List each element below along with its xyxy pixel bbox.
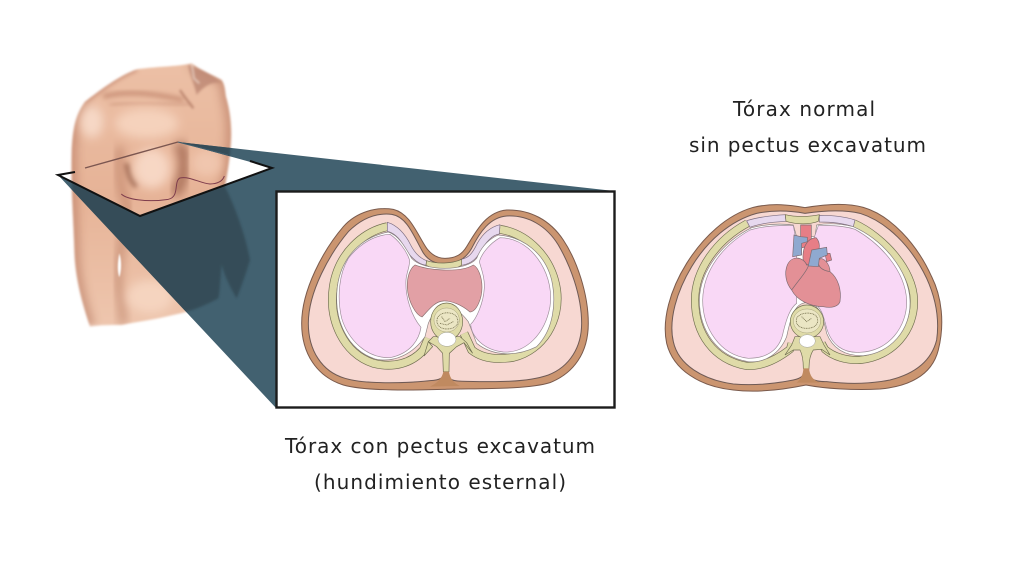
left lung xyxy=(339,234,421,358)
heading: normal chest: Tórax normal xyxy=(732,97,875,121)
diagram: normal chest xyxy=(665,204,942,391)
right lung xyxy=(813,225,907,352)
left lung xyxy=(703,225,797,358)
torso xyxy=(70,62,233,328)
skin and muscle layer xyxy=(665,204,942,391)
panel: enlarged box xyxy=(276,192,614,408)
spinous muscle junction xyxy=(430,372,460,387)
funnel connecting chest to the enlarged view xyxy=(58,142,614,408)
pleural space xyxy=(699,224,910,362)
heart and great vessels xyxy=(786,225,840,307)
ribs xyxy=(332,227,557,365)
heading: normal chest xyxy=(689,97,926,157)
section plane outline xyxy=(58,142,272,216)
illustration: torso with cross-section plane xyxy=(58,63,614,408)
caption: chest with pectus excavatum xyxy=(284,434,595,494)
ribs xyxy=(695,223,914,366)
spine base xyxy=(797,368,820,383)
diagram: chest with pectus excavatum xyxy=(302,209,588,390)
pleural space xyxy=(337,232,554,360)
sternum and cartilage xyxy=(387,222,500,270)
soft tissue xyxy=(672,211,938,385)
compressed heart xyxy=(407,265,482,317)
section line on the chest xyxy=(121,176,224,201)
torso seen through the funnel xyxy=(71,142,250,312)
vertebra xyxy=(785,305,830,371)
skin and muscle layer xyxy=(302,209,588,390)
vertebra xyxy=(424,303,473,372)
soft tissue xyxy=(308,214,582,383)
caption: chest with pectus excavatum: Tórax con pectus excavatum xyxy=(284,434,595,458)
right lung xyxy=(471,238,551,352)
caption: chest with pectus excavatum: (hundimiento esternal) xyxy=(314,470,566,494)
sternum and cartilage xyxy=(747,215,855,227)
heading: normal chest: sin pectus excavatum xyxy=(689,133,926,157)
